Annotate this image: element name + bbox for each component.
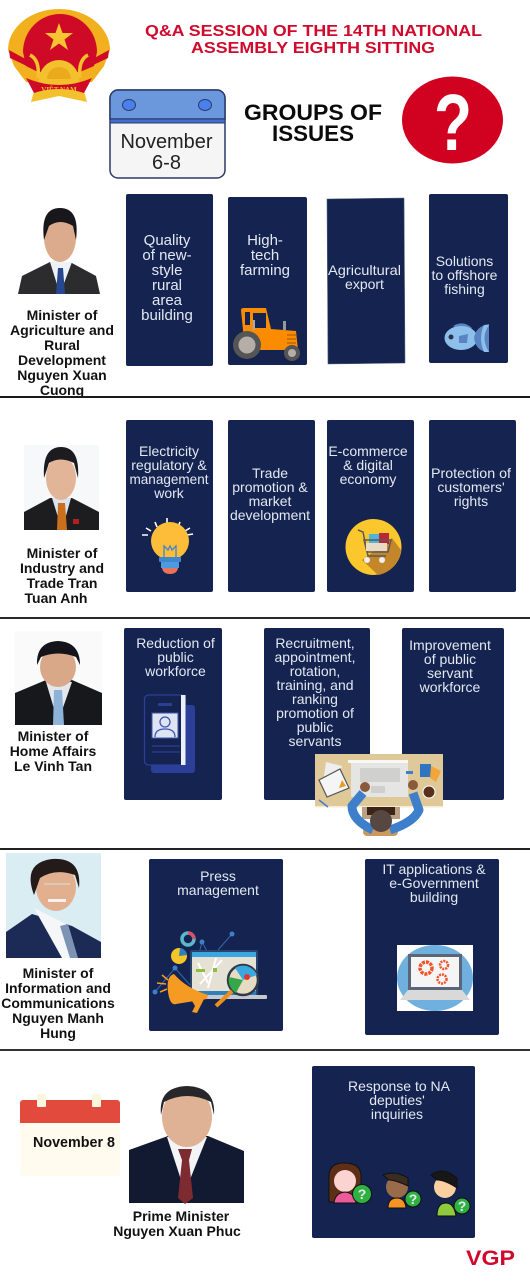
card: quality of new-style rural area building: rural [152, 277, 182, 294]
heading: groups of issues [244, 100, 382, 146]
card: trade promotion [228, 420, 315, 592]
card: recruitment: ranking [292, 691, 338, 707]
card: high-tech farming: High- [247, 232, 283, 249]
card: press management [149, 859, 283, 1031]
calendar: November 6-8: November [120, 131, 213, 153]
icon: boy with question bubble: ? [458, 1198, 466, 1214]
divider [0, 617, 530, 619]
title [145, 23, 482, 57]
card: high-tech farming: tech [251, 247, 279, 264]
card: protection of customers' rights: Protection of [431, 465, 511, 481]
card: e-commerce: E-commerce [328, 443, 408, 459]
name: Minister of Industry [20, 545, 104, 606]
card: IT applications [365, 859, 499, 1035]
card: response to NA deputies' inquiries: deputies' [369, 1092, 425, 1108]
calendar: November 6-8: 6-8 [152, 152, 181, 174]
card: recruitment: appointment, [275, 649, 355, 665]
card: recruitment: training, and [276, 677, 354, 693]
card: IT applications: IT applications & [382, 861, 486, 877]
icon: national emblem: VIỆT NAM [41, 86, 77, 94]
icon: question mark: ? [434, 78, 472, 167]
name: Minister of Home Affairs [10, 728, 97, 774]
divider [0, 396, 530, 398]
card: solutions to offshore fishing: Solutions [436, 253, 493, 269]
calendar: November 6-8 [110, 90, 225, 178]
card: quality of new-style rural area building: style [152, 262, 182, 279]
card: solutions to offshore fishing: fishing [444, 281, 485, 297]
card: IT applications: e-Government [389, 875, 479, 891]
card: solutions to offshore fishing: to offshore [432, 267, 498, 283]
card: e-commerce [327, 420, 414, 592]
name: Minister of Agriculture: Cuong [40, 382, 84, 398]
icon: national emblem [8, 9, 110, 102]
card: trade promotion: promotion & [232, 479, 308, 495]
card: reduction of public workforce: public [157, 649, 194, 665]
name: Minister of Information: Nguyen Manh [12, 1010, 104, 1026]
card: IT applications: building [410, 889, 458, 905]
card: agricultural export: Agricultural [328, 262, 401, 278]
card: recruitment: public [297, 719, 333, 735]
name: Minister of Industry: Industry and [20, 560, 104, 576]
heading: groups of issues: GROUPS OF [244, 100, 382, 125]
heading: groups of issues: ISSUES [272, 121, 354, 146]
card: response to NA deputies' inquiries: inquiries [371, 1106, 423, 1122]
icon: laptop with gears [397, 945, 473, 1011]
card: recruitment: rotation, [290, 663, 340, 679]
name: Minister of Industry: Minister of [27, 545, 98, 561]
icon: woman with question bubble: ? [358, 1186, 366, 1202]
card: electricity regulatory [126, 420, 213, 592]
name: Minister of Home Affairs: Home Affairs [10, 743, 97, 759]
portrait: Le Vinh Tan [15, 631, 102, 725]
card: improvement of public servant workforce: servant [427, 665, 473, 681]
icon: woman with question bubble [329, 1163, 372, 1204]
portrait: Nguyen Xuan Phuc [129, 1067, 244, 1204]
card: electricity regulatory: Electricity [139, 443, 199, 459]
card: e-commerce: economy [340, 471, 396, 487]
icon: shopping cart [346, 519, 402, 575]
name: Minister of Industry: Tuan Anh [24, 590, 88, 606]
name: Minister of Agriculture: Rural [44, 337, 80, 353]
icon: light bulb [142, 518, 193, 574]
name: Minister of Information: Minister of [23, 965, 94, 981]
card: electricity regulatory: work [153, 485, 185, 501]
title: Q&A SESSION OF THE 14TH NATIONAL [145, 23, 482, 40]
card: response to NA deputies' inquiries [312, 1066, 475, 1238]
card: quality of new-style rural area building: Quality [144, 232, 191, 249]
card: quality of new-style rural area building: building [141, 307, 193, 324]
card: solutions to offshore fishing [429, 194, 508, 363]
card: reduction of public workforce [124, 628, 222, 800]
illustration: laptop map and megaphone [152, 932, 267, 1013]
name: Minister of Home Affairs: Le Vinh Tan [14, 758, 92, 774]
name: Minister of Agriculture: Agriculture and [10, 322, 114, 338]
card: recruitment: servants [289, 733, 341, 749]
card: reduction of public workforce: Reduction of [136, 635, 215, 651]
name: Minister of Industry: Trade Tran [27, 575, 97, 591]
name: Minister of Agriculture: Minister of [27, 307, 98, 323]
card: improvement of public servant workforce: Improvement [409, 637, 491, 653]
card: improvement of public servant workforce: workforce [419, 679, 481, 695]
card: quality of new-style rural area building: area [152, 292, 183, 309]
card: trade promotion: market [249, 493, 291, 509]
card: recruitment: Recruitment, [275, 635, 355, 651]
card: trade promotion: development [230, 507, 310, 523]
name: Prime Minister: Prime Minister [133, 1208, 230, 1224]
card: recruitment: promotion of [276, 705, 354, 721]
portrait: Nguyen Manh Hung [6, 853, 101, 958]
name: Prime Minister [113, 1208, 241, 1239]
card: quality of new-style rural area building: of new- [142, 247, 192, 264]
divider [0, 848, 530, 850]
card: press management: management [177, 882, 259, 898]
calendar: November 8 [20, 1094, 120, 1176]
card: reduction of public workforce: workforce [144, 663, 206, 679]
name: Minister of Information: Information and [5, 980, 111, 996]
card: protection of customers' rights: customers' [437, 479, 505, 495]
name: Prime Minister: Nguyen Xuan Phuc [113, 1223, 241, 1239]
title: ASSEMBLY EIGHTH SITTING [191, 40, 435, 57]
icon: tractor [233, 308, 300, 361]
icon: question mark [402, 76, 503, 167]
icon: man with question bubble [383, 1173, 421, 1208]
card: electricity regulatory: management [130, 471, 209, 487]
illustration: person at desk [315, 754, 443, 836]
name: Minister of Agriculture [10, 307, 114, 398]
divider [0, 1049, 530, 1051]
card: agricultural export: export [345, 276, 384, 292]
icon: id card phone [144, 695, 195, 773]
card: electricity regulatory: regulatory & [131, 457, 207, 473]
card: trade promotion: Trade [252, 465, 288, 481]
calendar: November 8: November 8 [33, 1135, 115, 1151]
card: recruitment [264, 628, 370, 800]
name: Minister of Home Affairs: Minister of [18, 728, 89, 744]
icon: boy with question bubble [431, 1171, 470, 1216]
card: agricultural export [327, 198, 405, 364]
card: press management: Press [200, 868, 236, 884]
name: Minister of Information: Communications [1, 995, 115, 1011]
portrait: Tran Tuan Anh [24, 445, 99, 530]
card: high-tech farming [228, 197, 307, 365]
card: improvement of public servant workforce: of public [424, 651, 476, 667]
name: Minister of Information [1, 965, 115, 1041]
card: protection of customers' rights: rights [454, 493, 488, 509]
icon: fish [444, 323, 489, 352]
portrait: Nguyen Xuan Cuong [18, 208, 100, 294]
card: e-commerce: & digital [343, 457, 393, 473]
card: response to NA deputies' inquiries: Response to NA [348, 1078, 451, 1094]
name: Minister of Agriculture: Nguyen Xuan [17, 367, 107, 383]
card: high-tech farming: farming [240, 262, 290, 279]
card: improvement of public servant workforce [402, 628, 504, 800]
logo: VGP: VGP [466, 1247, 515, 1270]
name: Minister of Agriculture: Development [18, 352, 106, 368]
name: Minister of Information: Hung [40, 1025, 76, 1041]
icon: man with question bubble: ? [409, 1191, 417, 1207]
card: quality of new-style rural area building [126, 194, 213, 366]
card: protection of customers' rights [429, 420, 516, 592]
